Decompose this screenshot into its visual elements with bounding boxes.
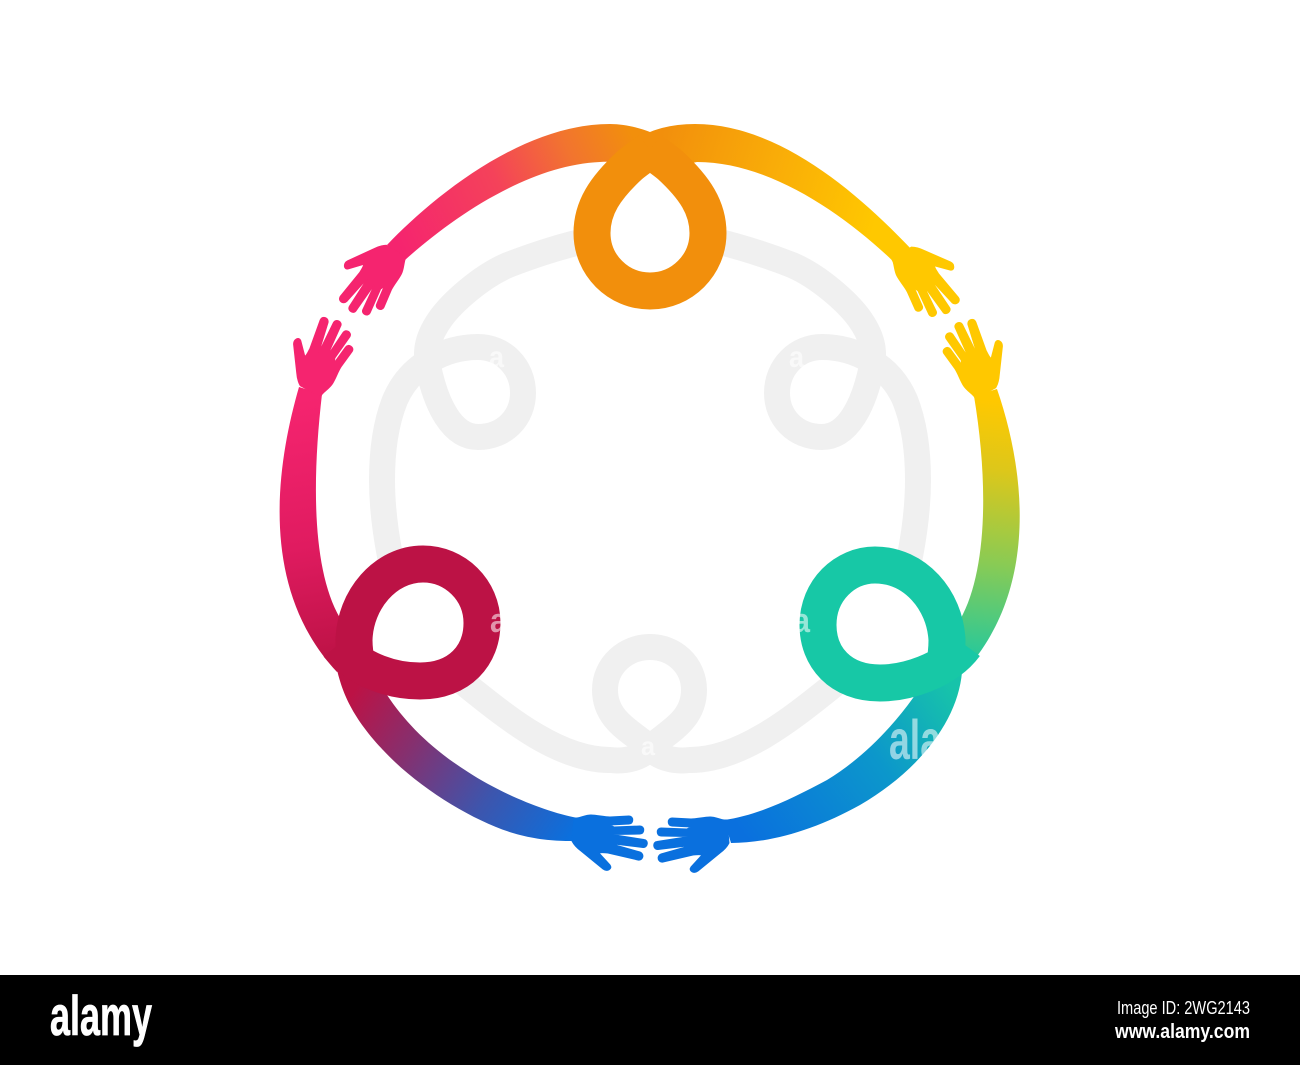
person: top-left arm and hand (pink to orange) — [327, 124, 668, 324]
image id: Image ID: 2WG2143 — [1117, 998, 1250, 1018]
watermark letters on coloured loops — [490, 602, 942, 771]
grey inner ring with three loops — [382, 232, 918, 760]
icon: blue hand reaching right — [572, 815, 647, 870]
top orange loop — [592, 150, 708, 291]
watermark letters on coloured loops: ala — [889, 708, 942, 771]
watermark letters on grey ring — [489, 341, 804, 761]
person: lower-right arm and hand (teal to blue) — [654, 670, 962, 872]
lower-right teal loop — [818, 565, 965, 683]
person: left arm and hand (pink to crimson) — [276, 307, 363, 672]
watermark letters on coloured loops: a — [490, 602, 508, 640]
watermark letters on grey ring: a — [641, 731, 656, 761]
icon: yellow hand reaching down — [888, 234, 972, 326]
lower-left crimson loop — [338, 564, 482, 681]
watermark letters on grey ring: a — [489, 341, 504, 374]
footer bar — [0, 975, 1300, 1065]
icon: blue hand reaching left — [654, 817, 729, 872]
person: top-right arm and hand (orange to yellow) — [632, 124, 972, 326]
icon: pink hand reaching down — [327, 232, 410, 324]
watermark letters on coloured loops: a — [793, 602, 811, 640]
icon: pink hand reaching up — [276, 307, 363, 400]
person: right arm and hand (yellow to teal) — [933, 309, 1020, 673]
alamy logo: alamy — [50, 984, 152, 1047]
icon: yellow hand reaching up — [933, 309, 1020, 402]
website: www.alamy.com — [1114, 1021, 1250, 1043]
person: lower-left arm and hand (crimson to blue) — [337, 665, 647, 870]
watermark letters on grey ring: a — [789, 341, 804, 374]
